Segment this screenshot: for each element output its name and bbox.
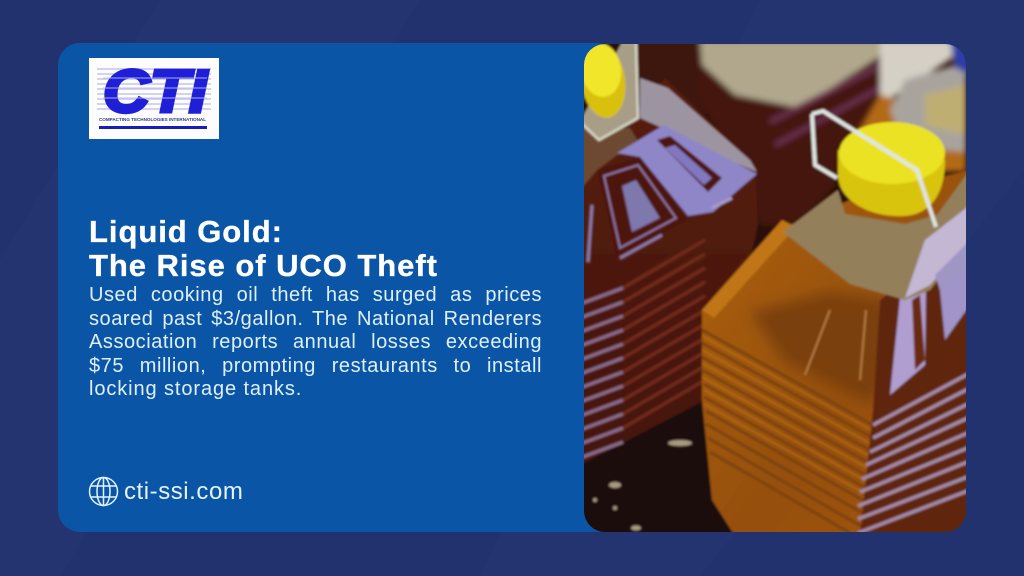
body text	[89, 284, 542, 400]
body text: Association reports annual losses exceeding	[89, 331, 542, 353]
back bottles	[630, 40, 970, 225]
left cap	[576, 40, 638, 140]
body text: $75 million, prompting restaurants to install	[89, 354, 542, 376]
ground	[584, 404, 730, 532]
logo: CTI: COMPACTING TECHNOLOGIES INTERNATIONAL	[99, 117, 206, 122]
big bottle	[702, 170, 970, 536]
body text: locking storage tanks.	[89, 378, 302, 400]
body text: Used cooking oil theft has surged as prices	[89, 284, 542, 306]
icon: globe	[88, 476, 118, 506]
left bottle	[580, 78, 758, 465]
title: The Rise of UCO Theft	[89, 248, 438, 283]
title	[89, 214, 438, 283]
photo: jugs of used cooking oil	[584, 44, 966, 532]
body text: soared past $3/gallon. The National Renderers	[89, 308, 542, 330]
big cap	[812, 111, 945, 227]
title: Liquid Gold:	[89, 214, 283, 249]
big bottle right face	[860, 281, 966, 532]
logo: CTI: CTI	[103, 58, 208, 125]
panel: blue content card	[58, 43, 618, 532]
website url: cti-ssi.com	[124, 478, 243, 505]
big bottle shoulder	[783, 170, 970, 300]
left bottle ribs	[580, 240, 705, 458]
logo: CTI	[89, 58, 219, 139]
